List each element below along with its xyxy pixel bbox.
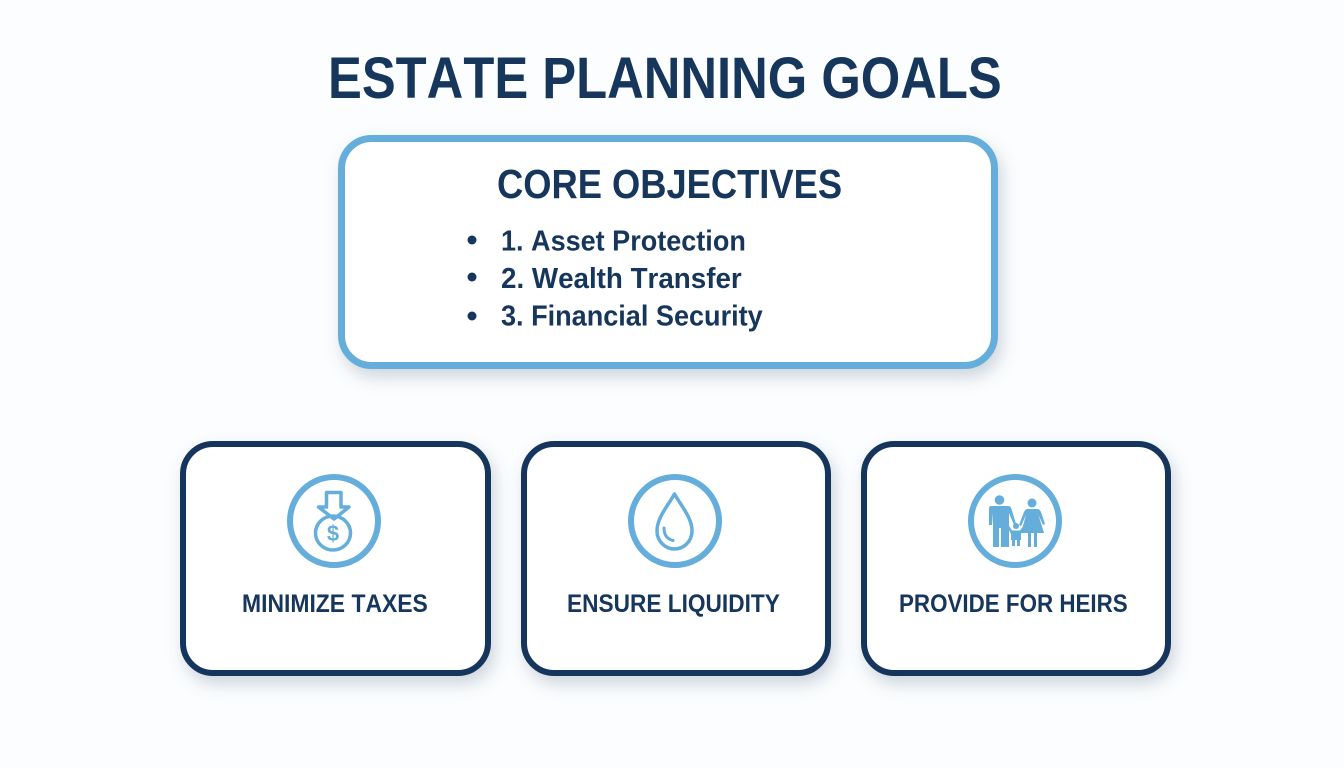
- list: objectives: [468, 225, 763, 332]
- title: ESTATE PLANNING GOALS: [328, 46, 1002, 111]
- icon: money bag with down arrow: $: [327, 521, 339, 546]
- panel: core objectives: [342, 138, 994, 366]
- heading: core objectives: CORE OBJECTIVES: [497, 162, 842, 208]
- panel: ensure liquidity: [524, 444, 828, 673]
- label: minimize taxes: MINIMIZE TAXES: [242, 590, 428, 618]
- panel: minimize taxes: [183, 444, 488, 673]
- list item: wealth transfer: 2. Wealth Transfer: [501, 263, 742, 294]
- list item: financial security: 3. Financial Security: [501, 300, 763, 332]
- label: provide for heirs: PROVIDE FOR HEIRS: [899, 591, 1128, 618]
- panel: provide for heirs: [864, 444, 1168, 673]
- icon: water drop: [631, 477, 719, 565]
- icon: money bag with down arrow: [290, 477, 378, 565]
- icon: family: [971, 477, 1059, 565]
- label: ensure liquidity: ENSURE LIQUIDITY: [567, 590, 780, 618]
- list item: asset protection: 1. Asset Protection: [501, 225, 746, 257]
